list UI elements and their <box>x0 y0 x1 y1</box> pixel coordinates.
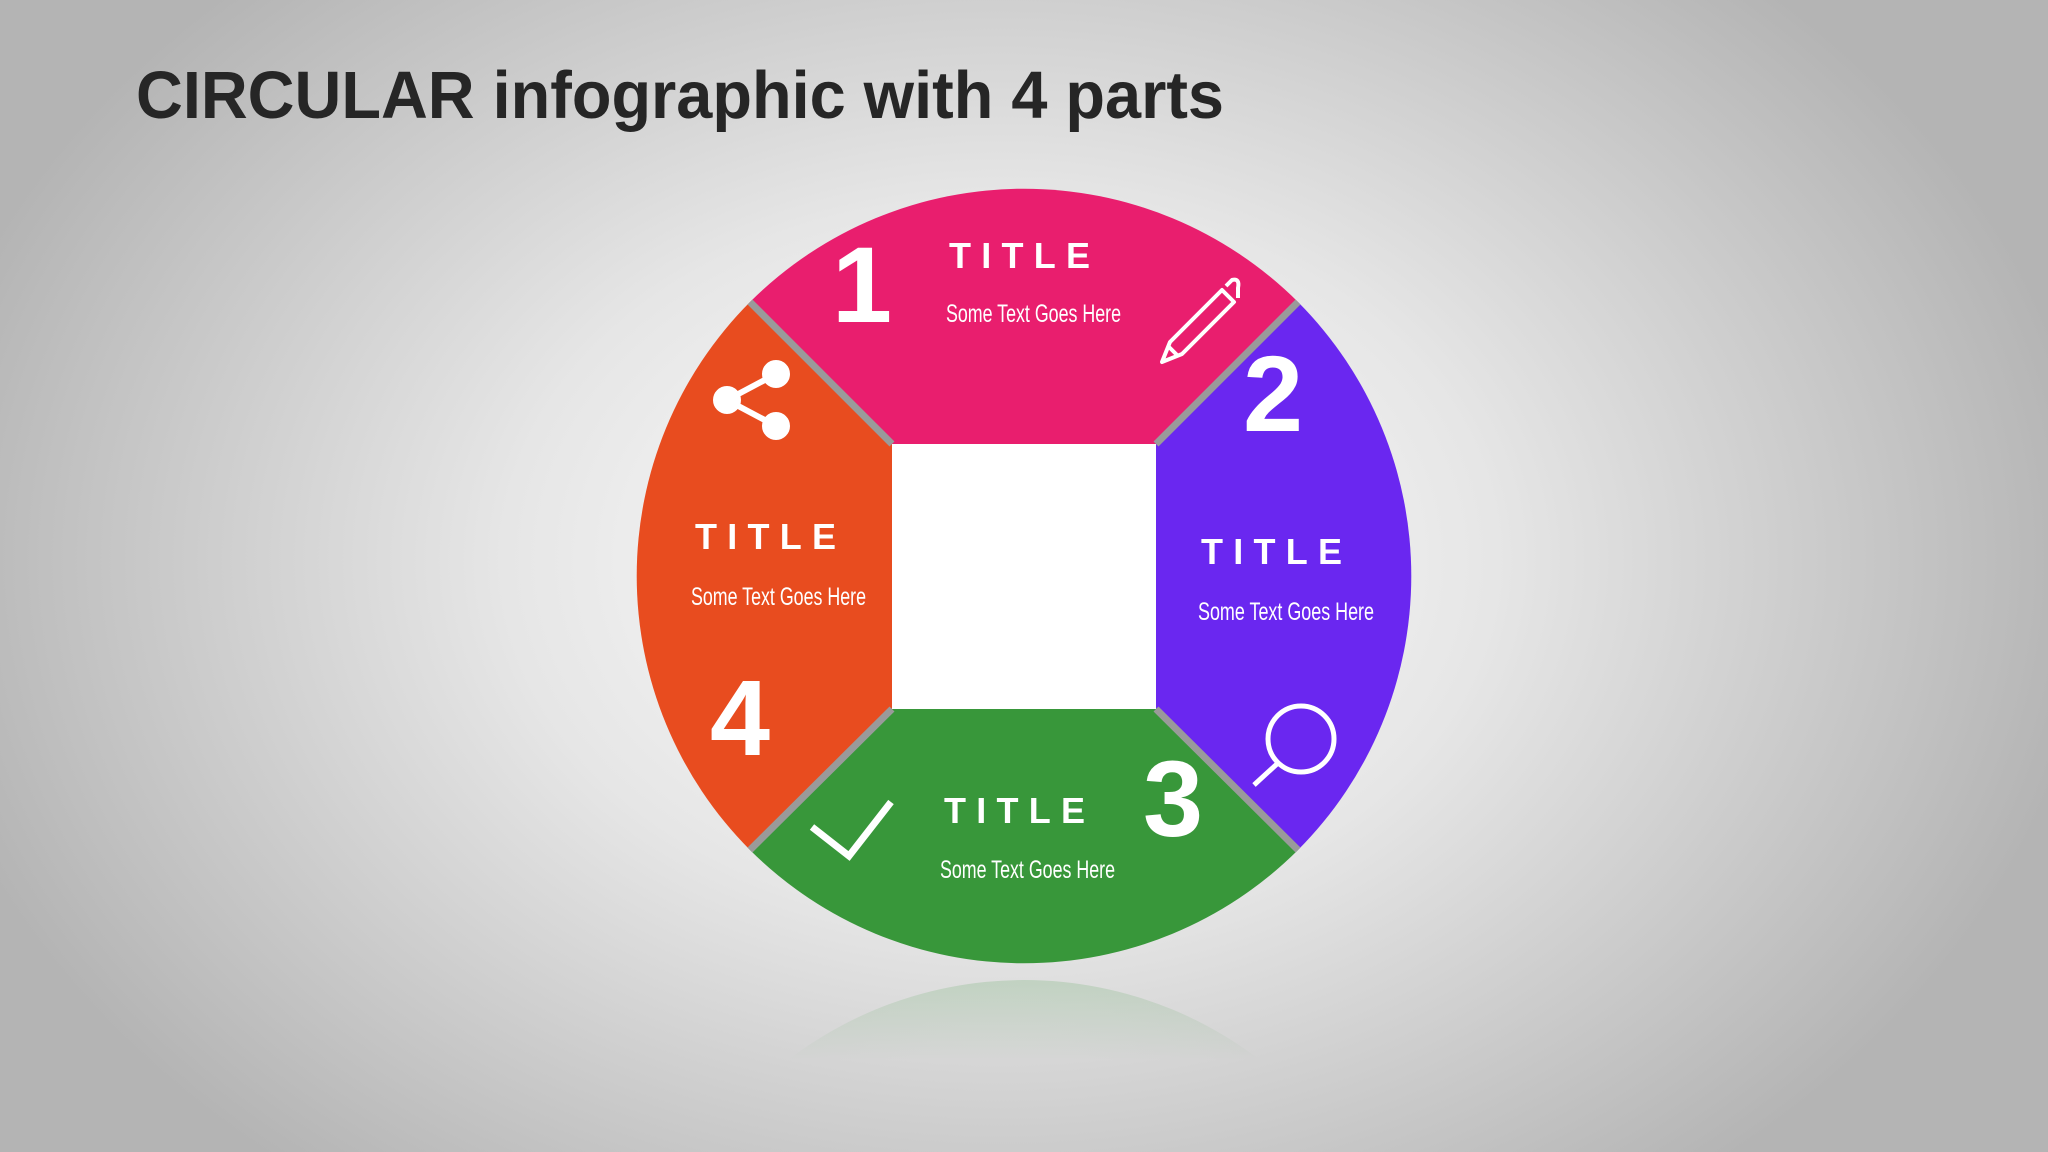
segment 2 content: 2 <box>1243 333 1303 454</box>
segment 4 content: Some Text Goes Here <box>691 583 866 611</box>
segment 2: right purple <box>1024 302 1411 850</box>
segment 3: bottom green <box>750 576 1298 963</box>
icon: magnifier <box>1254 706 1334 785</box>
icon: pencil <box>1162 280 1238 362</box>
segment 2 content: TITLE <box>1201 531 1342 572</box>
segment 4: left orange <box>637 302 1024 850</box>
icon: checkmark <box>812 802 891 856</box>
circular diagram <box>637 189 1411 963</box>
center square <box>892 444 1156 709</box>
reflection <box>822 980 1224 1038</box>
segment 1 content: TITLE <box>949 235 1090 276</box>
segment 3 content: Some Text Goes Here <box>940 856 1115 884</box>
segment 1 content: 1 <box>832 224 892 345</box>
segment 1: top pink <box>750 189 1298 576</box>
segment 4 content: TITLE <box>695 516 836 557</box>
segment 4 content <box>691 516 866 778</box>
segment 3 content: 3 <box>1143 738 1203 859</box>
title: CIRCULAR infographic with 4 parts <box>136 58 1224 133</box>
segment 2 content <box>1198 333 1374 626</box>
segment 3 content: TITLE <box>944 790 1085 831</box>
segment 1 content: Some Text Goes Here <box>946 300 1121 328</box>
icon: share <box>716 363 787 437</box>
segment 4 content: 4 <box>710 657 770 778</box>
segment 3 content <box>940 738 1203 884</box>
segment 2 content: Some Text Goes Here <box>1198 598 1374 626</box>
segment 1 content <box>832 224 1121 345</box>
